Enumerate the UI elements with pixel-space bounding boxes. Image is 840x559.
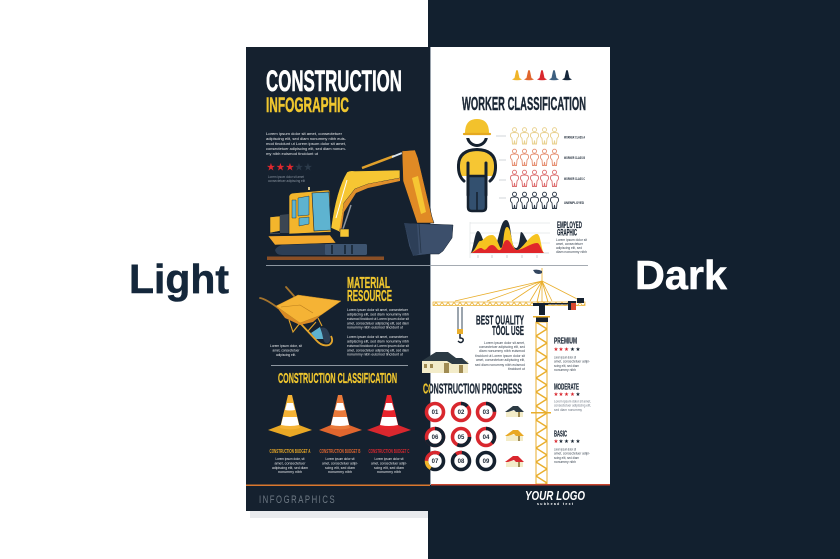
tool use text: diam nonummy nibh euismod [479, 348, 525, 353]
budget B: scing elit, sed diam [325, 465, 356, 470]
donut charts: 06 [432, 435, 439, 441]
material text: euismod tincidunt ut Lorem ipsum dolor sit [347, 316, 410, 321]
tier: premium: amet, consectetuer adipi- [554, 358, 591, 364]
tier: premium: Lorem ipsum dolor sit [554, 354, 577, 360]
people row: class C [510, 170, 559, 186]
donut charts: 08 [458, 459, 465, 465]
material text: euismod tincidunt ut Lorem ipsum dolor sit [347, 343, 410, 348]
material text: adipiscing elit, sed diam nonummy nibh [347, 338, 409, 344]
tier: premium [554, 336, 591, 372]
icon: worker [458, 119, 496, 211]
star rating: ★ [303, 162, 313, 174]
worker labels: WORKER CLASS A [564, 134, 585, 140]
material text: Lorem ipsum dolor sit amet, consectetuer [347, 307, 409, 312]
people row: class A [510, 128, 559, 144]
logo: YOUR LOGO [525, 489, 585, 503]
tier: basic: Lorem ipsum dolor sit [554, 446, 577, 452]
icon: orange cone [319, 395, 362, 437]
label: Dark: Dark [635, 252, 727, 298]
donut charts: 05 [458, 435, 465, 441]
tier: basic: ★ [564, 439, 569, 445]
material text [347, 307, 410, 356]
budget C: amet, consectetuer adipi- [371, 460, 408, 466]
donut charts: 04 [483, 435, 490, 441]
heading: best quality tool use: TOOL USE [492, 324, 524, 338]
tier: basic: ★ [576, 439, 581, 445]
budget A: nonummy nibh [278, 469, 302, 474]
tier: basic: scing elit, sed diam [554, 455, 579, 460]
tier: moderate: ★ [570, 392, 575, 398]
star rating [266, 162, 313, 174]
employed text [556, 237, 588, 254]
budget A: amet, consectetuer [274, 460, 306, 466]
heading: worker classification: WORKER CLASSIFICATION [462, 94, 586, 114]
logo: subhead text [537, 502, 574, 506]
tier: moderate: ★ [564, 392, 569, 398]
tier: moderate: ★ [576, 392, 581, 398]
tool use text: Lorem ipsum dolor sit amet, [484, 340, 525, 345]
wheelbarrow caption: amet, consectetuer [272, 348, 300, 352]
tier: moderate: sed diam nonummy [554, 407, 582, 412]
tool use text: amet, consectetuer adipiscing elit, [476, 357, 525, 362]
text: CONSTRUCTION PROGRESS [423, 382, 522, 398]
tier: premium: ★ [554, 347, 559, 353]
worker labels [564, 134, 585, 205]
star rating: ★ [266, 162, 276, 174]
panel: white half of poster [431, 47, 610, 486]
tier: moderate: consectetuer adipiscing elit, [554, 402, 591, 408]
tier: moderate [554, 382, 591, 412]
divider [266, 265, 430, 266]
tier: premium: ★ [576, 347, 581, 353]
divider [431, 265, 588, 266]
material text: nonummy nibh euismod tincidunt ut [347, 324, 404, 330]
heading: employed graphic [557, 220, 582, 238]
people row: unemployed [510, 192, 559, 208]
heading: material resource: RESOURCE [347, 288, 392, 305]
budget C: CONSTRUCTION BUDGET C [368, 449, 410, 455]
tier: premium: ★ [564, 347, 569, 353]
divider [271, 365, 408, 366]
heading: material resource: MATERIAL [347, 275, 390, 292]
tier: premium: scing elit, sed diam [554, 363, 579, 368]
star rating: ★ [294, 162, 304, 174]
rating caption: Lorem ipsum dolor sit amet [268, 175, 304, 179]
intro text: my nibh euismod tincidunt ut [266, 151, 319, 156]
excavator [267, 150, 453, 260]
tier: premium: nonummy nibh [554, 367, 576, 372]
wheelbarrow caption [270, 343, 303, 357]
title: construction: CONSTRUCTION [266, 65, 402, 98]
subtitle: infographic: INFOGRAPHIC [266, 94, 349, 117]
tier: moderate: Lorem ipsum dolor sit amet, [554, 398, 591, 404]
budget B: CONSTRUCTION BUDGET B [320, 449, 361, 455]
text: CONSTRUCTION PROGRESS [423, 382, 522, 398]
tool use text [475, 340, 526, 371]
intro text: mod tincidunt ut Lorem ipsum dolor sit amet, [266, 141, 346, 146]
donut charts [423, 404, 494, 473]
donut charts: 09 [483, 459, 490, 465]
tier: moderate: MODERATE [554, 382, 579, 392]
material text: adipiscing elit, sed diam nonummy nibh [347, 312, 409, 316]
material text: nonummy nibh euismod tincidunt ut [347, 352, 404, 356]
tier: basic [554, 428, 591, 464]
rating caption [268, 175, 305, 183]
employed text: Lorem ipsum dolor sit [556, 237, 588, 242]
cone colour strip [512, 70, 572, 80]
logo [525, 489, 585, 506]
tier: premium: ★ [570, 347, 575, 353]
tier: basic: ★ [559, 439, 564, 445]
wheelbarrow caption: adipiscing elit. [276, 352, 296, 357]
employed text: adipiscing elit, sed [556, 245, 582, 250]
tool use text: tincidunt ut Lorem ipsum dolor sit [475, 353, 526, 358]
tier: premium: PREMIUM [554, 336, 577, 346]
tier: premium: ★ [559, 347, 564, 353]
tier: basic: ★ [570, 439, 575, 445]
heading: construction progress [423, 383, 522, 394]
icon: yellow cone [268, 395, 312, 437]
icon: large house [420, 352, 469, 373]
tool use text: sed diam nonummy nibh euismod [475, 362, 525, 367]
budget A [270, 449, 311, 474]
icon: house yellow roof [505, 430, 524, 441]
area chart [470, 220, 550, 258]
footer rule right [431, 484, 610, 486]
budget B: nonummy nibh [328, 469, 352, 474]
budget C: Lorem ipsum dolor sit [374, 456, 404, 461]
heading: best quality tool use: BEST QUALITY [476, 314, 524, 328]
employed text: diam nonummy nibh [556, 249, 587, 254]
employed text: amet, consectetuer [556, 241, 584, 246]
tool use text: consectetuer adipiscing elit, sed [479, 344, 525, 349]
heading: material resource [347, 275, 392, 305]
label: Light: Light [129, 256, 229, 302]
budget C: scing elit, sed diam [374, 465, 405, 470]
material text: Lorem ipsum dolor sit amet, consectetuer [347, 334, 409, 339]
tool use text: tincidunt ut [508, 366, 526, 371]
material text: amet, consectetuer adipiscing elit, sed diam [347, 320, 410, 326]
crane [433, 268, 585, 484]
heading: best quality tool use [476, 314, 524, 338]
budget C: nonummy nibh [377, 469, 401, 474]
star rating: ★ [285, 162, 295, 174]
material text: amet, consectetuer adipiscing elit, sed diam [347, 348, 410, 352]
intro text [266, 131, 347, 156]
intro text: consectetuer adipiscing elit, sed diam nonum- [266, 146, 347, 151]
panel: dark half of poster: CONSTRUCTION CLASSIFICATION [278, 371, 397, 387]
star rating: ★ [276, 162, 285, 174]
intro text: Lorem ipsum dolor sit amet, consectetuer [266, 131, 343, 136]
rating caption: consectetuer adipiscing elit [268, 179, 305, 183]
intro text: adipiscing elit, sed diam nonummy nibh euis- [266, 136, 347, 141]
icon: house red roof [505, 456, 524, 467]
worker labels: UNEMPLOYED [564, 200, 584, 205]
tier: moderate: ★ [554, 392, 559, 398]
donut charts: 02 [458, 410, 465, 416]
budget B: amet, consectetuer adipi- [322, 460, 359, 466]
panel: dark half of poster [246, 47, 431, 511]
donut charts: 07 [432, 459, 439, 465]
donut charts: 03 [483, 410, 490, 416]
budget A: adipiscing elit, sed diam [272, 465, 309, 470]
icon: red cone [367, 395, 411, 437]
budget A: CONSTRUCTION BUDGET A [270, 449, 311, 455]
tier: moderate: ★ [559, 392, 564, 398]
tier: basic: amet, consectetuer adipi- [554, 450, 591, 456]
donut charts: 01 [432, 410, 439, 416]
worker labels: WORKER CLASS B [564, 155, 585, 160]
budget B: Lorem ipsum dolor sit [326, 456, 355, 461]
tier: basic: nonummy nibh [554, 459, 576, 464]
tier: basic: ★ [554, 439, 559, 445]
footer text: infographics: INFOGRAPHICS [259, 494, 335, 506]
budget B [320, 449, 361, 474]
icon: wheelbarrow [260, 287, 341, 345]
wheelbarrow caption: Lorem ipsum dolor, sit [270, 343, 303, 348]
footer rule left [246, 484, 430, 486]
leader lines [496, 136, 506, 198]
icon: house dark roof [505, 406, 524, 417]
people row: class B [510, 149, 559, 166]
worker labels: WORKER CLASS C [564, 176, 585, 181]
budget C [368, 449, 410, 474]
panel: white half of poster: EMPLOYED [557, 220, 582, 230]
tier: basic: BASIC [554, 428, 567, 438]
budget A: Lorem ipsum dolor, sit [276, 456, 305, 461]
heading: employed graphic: GRAPHIC [557, 228, 577, 238]
